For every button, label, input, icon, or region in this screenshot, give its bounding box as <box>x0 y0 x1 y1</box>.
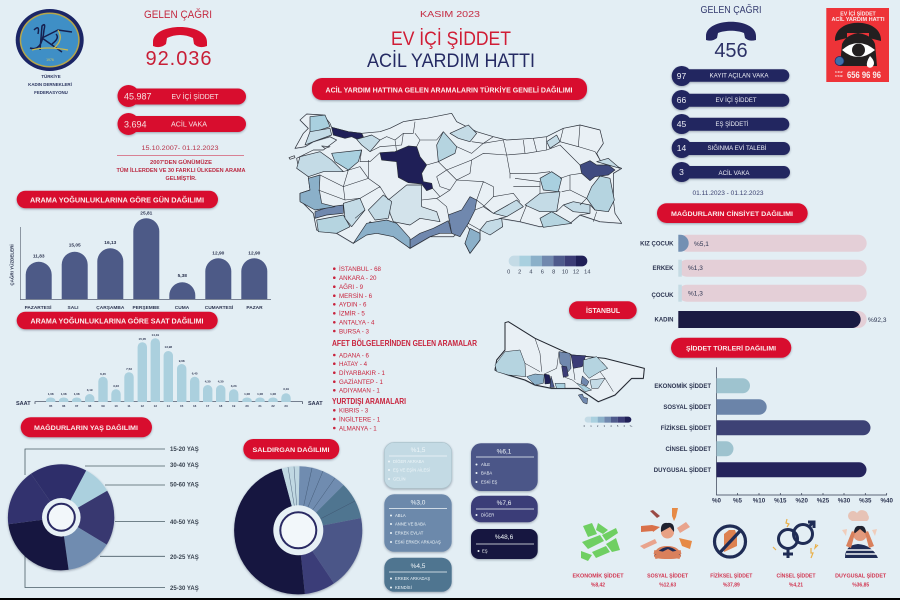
bar chart: calls by weekday: 25,81 <box>140 210 153 216</box>
pill: emergency: 3 <box>679 167 684 177</box>
caption: emotional: %36,85 <box>852 582 869 588</box>
islands <box>289 146 330 159</box>
bar chart: violence types: %10 <box>753 498 766 504</box>
icon: social violence, person with pointing hands <box>640 508 692 559</box>
center ring <box>273 505 323 555</box>
stat pills: navy <box>672 66 790 182</box>
heading: map <box>312 78 587 100</box>
list: abroad: İNGİLTERE - 1 <box>339 416 381 423</box>
heading: perpetrator: SALDIRGAN DAĞILIMI <box>252 445 330 454</box>
left call block heading: GELEN ÇAĞRI <box>144 8 212 21</box>
bar chart: violence types: SOSYAL ŞİDDET <box>663 404 711 411</box>
icon: physical violence, prohibited fist <box>714 526 746 557</box>
row: girl <box>640 235 867 252</box>
poster: hotline: 656 96 96 <box>847 70 881 80</box>
color scale <box>509 256 587 266</box>
caption: physical: %37,89 <box>723 582 740 588</box>
pill: spousal violence: EŞ ŞİDDETİ <box>716 119 749 128</box>
list: abroad <box>333 408 381 432</box>
bar chart: calls by hour: 3,19 <box>87 388 93 392</box>
slice: 20-25 <box>61 517 107 570</box>
bar chart: calls by hour: 07 <box>75 404 79 408</box>
stat pill: domestic violence <box>118 85 246 107</box>
card: 1.5 percent: GELİN <box>393 476 406 482</box>
list: disaster regions: GAZİANTEP - 1 <box>339 379 383 386</box>
list heading: disaster regions: AFET BÖLGELERİNDEN GELEN ARAMALAR <box>332 339 477 348</box>
bar chart: calls by weekday: 12,90 <box>212 250 225 256</box>
title: line two: ACİL YARDIM HATTI <box>367 51 535 72</box>
bar chart: calls by hour: 6,45 <box>100 372 106 376</box>
icon: economic violence, money <box>581 523 620 561</box>
list: disaster regions: HATAY - 4 <box>339 361 368 368</box>
card: 6.1 percent: %6,1 <box>497 448 512 456</box>
title block <box>367 9 535 72</box>
poster: hotline: EV İÇİ ŞİDDET <box>840 10 877 18</box>
heading: perpetrator <box>243 439 339 459</box>
scale numbers: 2 <box>518 270 521 276</box>
bar chart: violence types: %20 <box>796 498 808 504</box>
pill: recorded cases <box>672 66 789 86</box>
age legend labels <box>170 447 199 592</box>
title: line one: EV İÇİ ŞİDDET <box>391 29 511 50</box>
heading: day distribution <box>17 191 218 208</box>
left note text <box>116 159 246 182</box>
bottom black strip <box>0 598 900 600</box>
bar chart: calls by hour: 9,68 <box>179 359 185 363</box>
heading: Istanbul <box>569 301 637 319</box>
card: 7.6 percent: %7,6 <box>497 500 512 507</box>
bar chart: violence types: EKONOMİK ŞİDDET <box>654 383 711 390</box>
left note text: TÜM İLLERDEN VE 30 FARKLI ÜLKEDEN ARAMA <box>116 167 246 174</box>
caption: social: %12,63 <box>659 582 676 588</box>
monthly calls number: 456 <box>714 40 748 62</box>
list: provinces by call count: İSTANBUL - 68 <box>339 266 382 273</box>
list: disaster regions: ADANA - 6 <box>339 352 369 359</box>
bar chart: calls by hour: 6,45 <box>192 372 198 376</box>
slice: 1.5 <box>282 466 299 530</box>
age legend labels: 50-60 YAŞ <box>170 483 199 489</box>
card: 4.5 percent: ERKEK ARKADAŞ <box>395 576 430 581</box>
scale numbers: 4 <box>529 270 533 276</box>
card: 4.5 percent: KENDİSİ <box>395 585 412 590</box>
bar chart: calls by hour: 23 <box>284 404 288 408</box>
list: provinces by call count: ANKARA - 20 <box>339 275 377 282</box>
heading: map: ACİL YARDIM HATTINA GELEN ARAMALARIN TÜRKİYE GENELİ DAĞILIMI <box>326 86 573 94</box>
age legend labels: 30-40 YAŞ <box>170 463 199 469</box>
caption: sexual <box>776 572 816 588</box>
bar chart: violence types: %0 <box>712 498 722 504</box>
bar chart: violence types: %25 <box>817 498 830 504</box>
heading: day distribution: ARAMA YOĞUNLUKLARINA GÖRE GÜN DAĞILIMI <box>30 195 204 204</box>
right call block heading: GELEN ÇAĞRI <box>700 3 762 16</box>
bar chart: calls by hour: 21 <box>258 404 262 408</box>
bar chart: calls by hour: 4,30 <box>218 380 224 384</box>
Istanbul legend <box>584 417 633 428</box>
bar chart: violence types: %35 <box>859 498 872 504</box>
scale numbers: 10 <box>562 270 568 276</box>
row: child <box>652 285 867 302</box>
bar chart: calls by hour: 20 <box>245 404 249 408</box>
bar chart: calls by hour: 13 <box>154 404 157 408</box>
bar chart: calls by weekday: 15,05 <box>69 242 81 248</box>
card: 6.1 percent: BABA <box>481 470 492 476</box>
list: disaster regions: ADIYAMAN - 1 <box>339 388 380 395</box>
pill: recorded cases: 97 <box>677 71 686 81</box>
logo: federation emblem <box>16 9 84 71</box>
row: child: ÇOCUK <box>652 293 674 299</box>
icon: sexual violence, gender symbols <box>773 519 818 558</box>
row: woman: KADIN <box>654 318 674 324</box>
age legend labels: 25-30 YAŞ <box>170 586 199 592</box>
bar chart: calls by weekday: 16,13 <box>104 240 117 246</box>
row: male: ERKEK <box>652 266 674 272</box>
scale numbers: 1 <box>590 424 592 428</box>
outline <box>295 113 622 253</box>
bar chart: calls by hour: 14 <box>167 404 170 408</box>
caption: economic <box>572 572 624 588</box>
right date range: 01.11.2023 - 01.12.2023 <box>692 190 764 197</box>
scale numbers: 14 <box>584 270 590 276</box>
slice: 25-30 <box>8 517 69 570</box>
card: 3.0 percent: ABLA <box>395 513 406 518</box>
row: male <box>652 260 867 277</box>
scale numbers: 6 <box>624 424 626 428</box>
total calls number: 92.036 <box>146 48 212 70</box>
slice: 15-20 <box>8 474 61 524</box>
bar chart: calls by weekday: ÇAĞRI YÜZDELERİ <box>8 244 14 286</box>
list: provinces by call count: BURSA - 3 <box>339 328 369 335</box>
pill: spousal violence: 45 <box>677 119 686 129</box>
caption: physical <box>710 572 752 588</box>
pill: emergency: ACİL VAKA <box>718 168 750 177</box>
slice group: 3.0 <box>298 466 344 530</box>
age legend labels: 15-20 YAŞ <box>170 447 199 453</box>
stat pill: domestic violence: EV İÇİ ŞİDDET <box>172 92 219 101</box>
bar chart: calls by hour: 12 <box>141 404 144 408</box>
slice: 50-60 <box>61 470 107 517</box>
scale numbers: 0 <box>584 424 586 428</box>
caption: social: SOSYAL ŞİDDET <box>647 572 688 580</box>
bar chart: calls by hour: 17 <box>206 404 210 408</box>
card: 3.0 percent: ERKEK EVLAT <box>395 530 424 536</box>
bar chart: calls by hour: 3,23 <box>113 384 119 388</box>
card: 3.0 percent <box>384 494 452 552</box>
map: Istanbul districts <box>495 322 644 404</box>
card: 3.0 percent: ESKİ ERKEK ARKADAŞ <box>395 540 441 544</box>
heading: hour distribution <box>17 312 218 329</box>
bar chart: calls by hour: 1,08 <box>74 392 80 396</box>
bar chart: calls by hour <box>16 333 323 408</box>
heading: victim age: MAĞDURLARIN YAŞ DAĞILIMI <box>34 423 138 432</box>
bar chart: calls by hour: 05 <box>49 404 53 408</box>
stat pill: emergency: 3.694 <box>124 120 147 130</box>
pill: shelter request <box>672 138 790 158</box>
row: girl: %5,1 <box>694 241 709 248</box>
left note text: GELMİŞTİR. <box>166 175 197 182</box>
card: 6.1 percent: ESKİ EŞ <box>481 480 497 484</box>
card: 4.5 percent <box>384 558 452 592</box>
icon: navy phone <box>706 22 756 41</box>
bar chart: calls by weekday: CUMARTESİ <box>205 304 234 311</box>
list: provinces by call count: MERSİN - 6 <box>339 293 373 300</box>
card: 1.5 percent: EŞ VE EŞİN AİLESİ <box>393 468 430 472</box>
bar chart: violence types <box>654 367 893 504</box>
heading: violence types: ŞİDDET TÜRLERİ DAĞILIMI <box>686 344 776 352</box>
bar chart: calls by hour: 09 <box>101 404 105 408</box>
heading: violence types <box>671 338 791 358</box>
bar chart: calls by hour: 13,98 <box>165 345 172 349</box>
bar chart: calls by hour: 10 <box>114 404 118 408</box>
bar chart: calls by weekday: ÇARŞAMBA <box>96 305 125 311</box>
card: 1.5 percent: %1,5 <box>411 447 426 454</box>
caption: economic: EKONOMİK ŞİDDET <box>572 572 624 580</box>
bar chart: calls by weekday: CUMA <box>175 305 190 311</box>
icon: red phone <box>153 27 207 47</box>
map legend <box>507 256 590 276</box>
list: provinces by call count: AYDIN - 6 <box>339 302 367 309</box>
poster: hotline: ACİL YARDIM HATTI <box>832 16 885 23</box>
list: provinces by call count: AĞRI - 9 <box>339 284 364 291</box>
slice: 40-50 <box>61 491 114 545</box>
scale numbers: 12 <box>573 270 579 276</box>
bar chart: calls by hour: 22 <box>271 404 275 408</box>
bar chart: calls by hour: 18 <box>219 404 223 408</box>
bar chart: calls by weekday <box>8 210 271 311</box>
card: 7.6 percent <box>471 496 538 522</box>
row: girl: KIZ ÇOCUK <box>640 242 674 248</box>
pill: shelter request: 14 <box>677 143 686 153</box>
pill: recorded cases: KAYIT AÇILAN VAKA <box>710 73 769 80</box>
colored provinces <box>297 115 620 253</box>
scale numbers: 8 <box>552 270 555 276</box>
bar chart: calls by weekday: PERŞEMBE <box>133 305 160 311</box>
center ring <box>42 498 81 537</box>
bar chart: calls by weekday: 11,83 <box>33 254 45 260</box>
card: 3.0 percent: ANNE VE BABA <box>395 522 426 526</box>
age legend labels: 20-25 YAŞ <box>170 555 199 561</box>
heading: Istanbul: İSTANBUL <box>586 307 621 315</box>
bar chart: calls by hour: 06 <box>62 404 66 408</box>
card: 48.6 percent: %48,6 <box>495 534 514 541</box>
bar chart: calls by hour: 1,08 <box>257 392 263 396</box>
scale numbers: 0 <box>507 270 510 276</box>
row: woman: %92,3 <box>868 317 887 324</box>
caption: emotional <box>835 572 886 588</box>
bar chart: calls by hour: 4,30 <box>205 380 211 384</box>
islands <box>578 394 588 404</box>
scale numbers: 4 <box>610 424 612 428</box>
bar chart: calls by hour: 14,19 <box>152 333 159 337</box>
bar chart: calls by hour: 3,19 <box>283 387 289 391</box>
card: 4.5 percent: %4,5 <box>411 563 426 570</box>
logo caption: KADIN DERNEKLERİ <box>28 82 72 87</box>
row: child: %1,3 <box>688 290 703 298</box>
caption: emotional: DUYGUSAL ŞİDDET <box>835 572 886 580</box>
province borders <box>318 122 600 230</box>
left note text: 2007'DEN GÜNÜMÜZE <box>150 159 212 166</box>
slice: 48.6 <box>234 468 305 594</box>
card: 3.0 percent: %3,0 <box>411 500 426 506</box>
slice: 6.1 <box>298 518 362 583</box>
heading: victim gender: MAĞDURLARIN CİNSİYET DAĞILIMI <box>671 209 793 218</box>
heading: victim age <box>21 417 152 437</box>
list: provinces by call count: ANTALYA - 4 <box>339 320 375 327</box>
caption: physical: FİZİKSEL ŞİDDET <box>710 572 752 580</box>
caption: social <box>647 572 688 588</box>
left date range: 15.10.2007- 01.12.2023 <box>142 145 219 152</box>
title: date: KASIM 2023 <box>420 9 480 19</box>
map: Türkiye provinces <box>289 113 622 253</box>
card: 6.1 percent <box>471 443 538 491</box>
scale numbers <box>584 424 633 428</box>
heading: hour distribution: ARAMA YOĞUNLUKLARINA GÖRE SAAT DAĞILIMI <box>30 316 204 325</box>
bar chart: calls by weekday: 5,38 <box>178 273 187 279</box>
bar chart: violence types: FİZİKSEL ŞİDDET <box>661 425 711 432</box>
bar chart: calls by hour: 16 <box>193 404 197 408</box>
caption: economic: %8,42 <box>591 582 605 588</box>
outline <box>495 322 644 402</box>
logo caption <box>28 74 72 95</box>
poster: hotline: 0 212 <box>835 70 843 74</box>
list: disaster regions: DİYARBAKIR - 1 <box>339 370 386 377</box>
slice group: 4.5 <box>298 485 361 530</box>
pill: shelter request: SIĞINMA EVİ TALEBİ <box>708 143 767 152</box>
caption: sexual: %4,21 <box>789 582 803 588</box>
bar chart: calls by hour: SAAT <box>16 401 31 407</box>
scale numbers: 6 <box>541 270 544 276</box>
scale numbers: 2 <box>597 424 599 428</box>
color scale <box>585 417 631 423</box>
bar chart: violence types: DUYGUSAL ŞİDDET <box>654 467 711 474</box>
list heading: abroad: YURTDIŞI ARAMALARI <box>332 397 406 406</box>
bar chart: violence types: %5 <box>733 498 743 504</box>
bar chart: calls by weekday: 12,90 <box>248 250 261 256</box>
caption: sexual: CİNSEL ŞİDDET <box>776 572 816 580</box>
stat pill: emergency <box>118 113 246 135</box>
card: 6.1 percent: AİLE <box>481 462 490 467</box>
list: provinces by call count: İZMİR - 5 <box>339 311 365 318</box>
scale numbers <box>507 270 590 276</box>
bar chart: calls by hour: 7,53 <box>126 367 132 371</box>
heading: victim gender <box>657 203 808 223</box>
bar chart: violence types: CİNSEL ŞİDDET <box>665 446 711 453</box>
card: 7.6 percent: DİĞER <box>481 512 494 518</box>
bar chart: calls by hour: SAAT <box>308 401 323 407</box>
bar chart: calls by hour: 1,08 <box>244 392 250 396</box>
card: 1.5 percent: DİĞER AKRABA <box>393 459 424 464</box>
bar chart: calls by hour: 1,08 <box>48 392 54 396</box>
bar chart: violence types: %15 <box>774 498 787 504</box>
donut chart: perpetrator <box>234 466 362 594</box>
card: 48.6 percent <box>471 529 538 559</box>
row: male: %1,3 <box>688 265 703 272</box>
list: abroad: KIBRIS - 3 <box>339 408 369 415</box>
bar chart: calls by hour: 11 <box>127 404 131 408</box>
bar chart: calls by weekday: PAZAR <box>246 305 263 311</box>
age legend lines <box>25 449 165 588</box>
list: abroad: ALMANYA - 1 <box>339 425 377 432</box>
stat pill: domestic violence: 45.987 <box>124 92 152 102</box>
pill: domestic violence: 66 <box>677 95 686 105</box>
age legend labels: 40-50 YAŞ <box>170 520 199 526</box>
scale numbers: 5 <box>617 424 619 428</box>
slice: 7.6 <box>298 530 334 594</box>
list: disaster regions <box>333 352 386 395</box>
bar chart: calls by hour: 15 <box>180 404 184 408</box>
poster: hotline <box>826 8 889 82</box>
bar chart: calls by weekday: SALI <box>68 305 79 311</box>
icon captions <box>572 572 886 588</box>
donut chart: victim age <box>8 464 114 570</box>
bar chart: calls by hour: 1,08 <box>270 392 276 396</box>
pill: domestic violence: EV İÇİ ŞİDDET <box>716 95 757 104</box>
pill: spousal violence <box>672 114 789 134</box>
poster: hotline: 0 549 <box>835 74 843 78</box>
bar chart: violence types: %30 <box>838 498 851 504</box>
card: 48.6 percent: EŞ <box>482 548 488 554</box>
scale numbers: 3 <box>604 424 606 428</box>
scale numbers: 7+ <box>629 424 633 428</box>
slice: 30-40 <box>31 464 86 517</box>
bar chart: victim gender <box>640 235 887 328</box>
bar chart: calls by hour: 15,05 <box>139 337 146 341</box>
slice separators <box>288 466 355 530</box>
list: provinces by call count <box>333 266 382 335</box>
bar chart: calls by hour: 3,23 <box>231 384 237 388</box>
logo caption: TÜRKİYE <box>41 74 61 79</box>
row: woman <box>654 311 887 328</box>
pill: emergency <box>672 162 790 182</box>
icon: emotional violence, person under cloud <box>842 510 878 558</box>
colored districts <box>495 338 613 392</box>
bar chart: calls by weekday: PAZARTESİ <box>25 304 52 311</box>
card: 1.5 percent <box>384 442 452 488</box>
bar chart: calls by hour: 08 <box>88 404 92 408</box>
bar chart: calls by hour: 19 <box>232 404 236 408</box>
pill: domestic violence <box>672 90 789 110</box>
bar chart: violence types: %40 <box>881 498 893 504</box>
logo caption: FEDERASYONU <box>34 90 68 95</box>
logo: federation emblem: 1976 <box>46 58 54 62</box>
stat pill: emergency: ACİL VAKA <box>171 120 207 128</box>
bar chart: calls by hour: 1,08 <box>61 392 67 396</box>
